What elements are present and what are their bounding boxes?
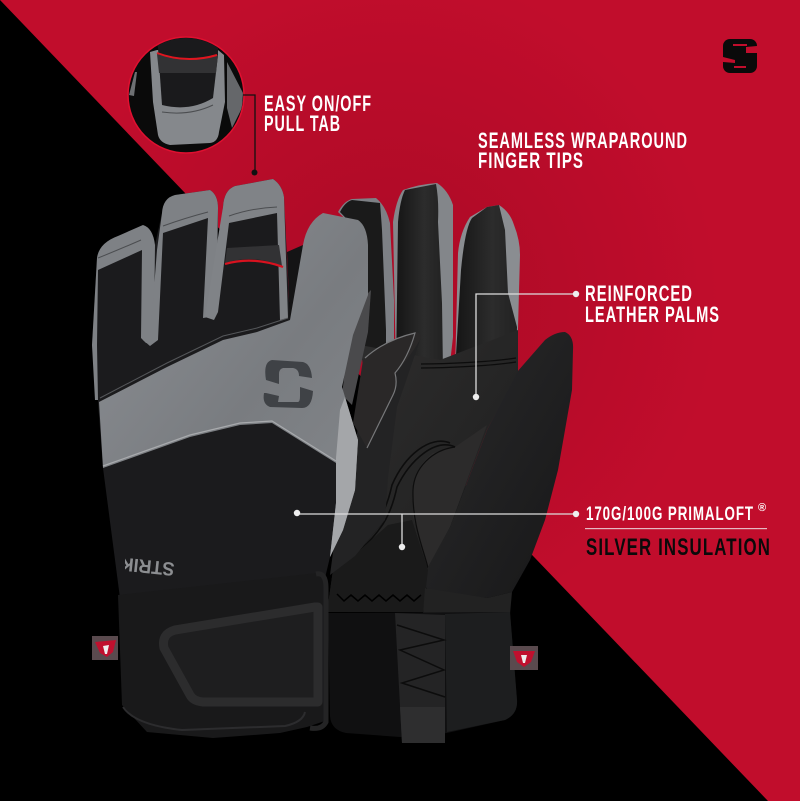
upper panel seam [100,318,288,398]
neighbouring finger [227,62,243,128]
label: seamless wraparound finger tips: FINGER TIPS [478,148,584,173]
red stripe [157,53,217,59]
label: reinforced leather palms [585,281,720,327]
label: reinforced leather palms: LEATHER PALMS [585,302,720,327]
thumb of palm glove [425,332,573,598]
cuff side binding [310,574,326,728]
rib knit [157,54,218,73]
cuff right shading [445,612,517,732]
divider under insulation label [585,528,767,529]
callout: insulation leader [294,510,579,550]
lighter side strip [330,397,358,557]
callout: leather palm leader [473,291,579,400]
lower palm black panel [327,520,428,612]
suede lining beside thumb [330,340,420,575]
S logo on glove [264,360,313,408]
cuff pull tab [395,613,445,743]
label: seamless wraparound finger tips: SEAMLESS WRAPAROUND [478,128,688,153]
pull tab rib [225,245,282,266]
middle finger panel [205,179,288,320]
mesh vent patch [342,290,371,405]
icon: S brand logo [723,39,757,73]
Primaloft tag left [92,636,118,660]
fingertip patch seam [162,105,213,113]
gap patch between fingers [287,245,303,322]
middle finger of palm glove [393,183,453,372]
far finger of palm glove [338,198,394,360]
lower panel seam [103,421,336,466]
finger side panels [150,50,225,145]
palm glove cuff [328,612,517,737]
palm stitching [356,358,516,568]
callout: pull tab leader [243,95,258,176]
label: easy on/off pull tab: PULL TAB [264,111,341,136]
zigzag stitching [337,594,421,601]
glove silhouette [92,179,336,598]
finger black fabric [157,34,218,107]
grey diagonal panel with index finger [99,213,368,557]
inset circle: pull tab detail [128,34,244,153]
back glove cuff [118,573,328,738]
palm glove [327,183,573,743]
hook-and-loop strap [163,607,318,702]
leather palm [327,330,518,612]
label: easy on/off pull tab [264,91,372,136]
back glove [92,179,420,738]
label: 170g/100g primaloft: ® [758,502,766,514]
palm pad [413,425,487,567]
little finger panel [92,225,155,400]
wrist elastic band [423,588,512,614]
cuff hem [123,707,305,730]
STRIKE wordmark: STRIKE [108,551,176,579]
small side detail [129,72,137,96]
Primaloft tag right [510,646,538,670]
label: easy on/off pull tab: EASY ON/OFF [264,91,372,116]
red pull tab stripe [225,261,283,267]
thumb of back glove [353,332,420,448]
label: seamless wraparound finger tips [478,128,688,173]
leather finger of palm glove [455,205,520,372]
ring finger panel [143,190,218,346]
label: reinforced leather palms: REINFORCED [585,281,693,306]
